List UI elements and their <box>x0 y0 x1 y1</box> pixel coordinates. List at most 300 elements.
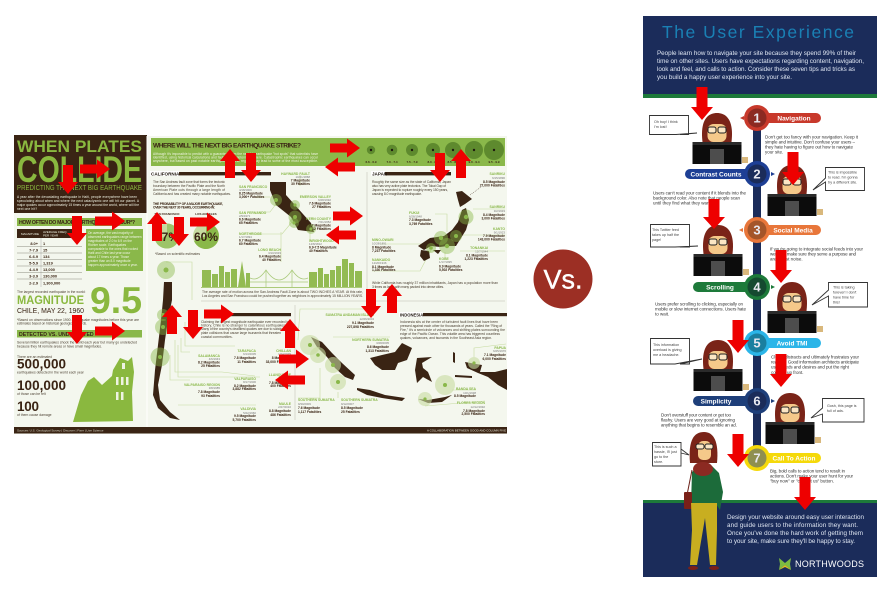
speech bubble 7: This is such a <box>654 445 677 449</box>
illustration: skyline and bridge: The average rate of motion across the San Andreas Fault Zone is about TWO INCHES A YEAR. At this rate, <box>202 290 363 294</box>
arrow <box>80 160 110 178</box>
labels: Chile quakes: 8.8 Magnitude <box>269 409 291 413</box>
stats: detected counts: 100 <box>17 399 39 414</box>
tip 4: scrolling: Users prefer scrolling to clicking, especially on <box>655 302 743 306</box>
labels: Indonesia quakes: 8.5 Magnitude <box>454 394 476 398</box>
character at desk 1 <box>692 113 748 164</box>
arrow <box>770 354 792 387</box>
labels: Chile quakes: VALDIVIA <box>240 407 257 411</box>
tip 1: navigation: your site. <box>765 150 783 154</box>
tip 1: navigation: they hate having to figure out how to navigate <box>765 144 853 150</box>
section: Chile: Claiming the largest magnitude earthquake ever recorded in <box>201 320 289 324</box>
tip 1: navigation: simple and intuitive. Don't confuse your users – <box>765 140 855 144</box>
arrow <box>770 250 792 283</box>
section: Chile <box>201 313 291 339</box>
panel: earthquake infographic <box>14 135 507 434</box>
character at desk 3 <box>694 225 749 276</box>
heading: how often <box>17 218 142 226</box>
labels: California quakes: LONG BEACH <box>258 248 282 252</box>
section: California: American Plate cuts through a large length of <box>153 188 225 192</box>
arrow <box>727 434 749 467</box>
labels: Chile quakes: 1/24/1939 <box>278 352 291 356</box>
arrow <box>782 152 804 185</box>
arrow <box>727 320 749 353</box>
section: Indonesia: pressed against each other for thousands of years. Called the "Ring of <box>400 324 502 328</box>
stats: detected counts: 100,000 <box>17 378 66 393</box>
labels: Indonesia quakes: 9.1 Magnitude <box>352 321 374 325</box>
tip 1: navigation <box>740 105 859 154</box>
labels: Japan quakes: 6.9 Magnitude <box>439 264 461 268</box>
speech bubble 4: have time for <box>833 296 855 300</box>
labels: Indonesia quakes: SUMATRA ANDAMAN ISLAND <box>326 313 375 317</box>
labels: Chile quakes: 486 Fatalities <box>270 413 291 417</box>
labels: Chile quakes: 400 Fatalities <box>270 384 291 388</box>
labels: Japan quakes: SANRIKU <box>490 172 506 176</box>
footer bar: A COLLABORATION BETWEEN GOOD AND COLUMN FIVE <box>427 428 506 432</box>
header: title and intro: The User Experience <box>662 22 854 42</box>
labels: Chile quakes: VALPARAISO REGION <box>184 383 221 387</box>
stats: detected counts: earthquakes detected in the world each year <box>17 370 85 374</box>
tip 5: avoid TMI: Avoid TMI <box>777 340 808 348</box>
labels: Indonesia quakes: FLORES REGION <box>457 401 486 405</box>
callout: vast majority: Richter scale. Earthquakes <box>88 243 126 247</box>
tip 6: simplicity: 6 <box>753 394 761 408</box>
labels: California quakes: 3,000+ Fatalities <box>239 195 265 199</box>
tip 6: simplicity: Don't overstuff your content or get too <box>661 412 731 418</box>
speech bubble 4 <box>812 282 868 307</box>
section: Japan: Roughly the same size as the state of California, Japan <box>372 180 451 184</box>
map: Chile <box>150 261 260 420</box>
labels: Japan quakes: 5,502 Fatalities <box>439 268 463 272</box>
table: magnitude frequency: 5-5.9 <box>29 260 39 266</box>
labels: California quakes: 27 Fatalities <box>312 205 331 209</box>
labels: Japan quakes: TONANKAI <box>470 246 488 250</box>
labels: California quakes: NORTHRIDGE <box>239 232 263 236</box>
tip 5: avoid TMI: user needs and desires and put the right <box>771 364 850 370</box>
labels: Japan quakes: 8.4 Magnitude <box>483 213 505 217</box>
heading panel: where will the next quake strike: identified, using historical calculations and fault data to determine where. Catastrophic earthquakes can occur <box>153 156 319 160</box>
section: Indonesia: INDONESIA <box>400 312 423 318</box>
labels: California quakes: 65 Fatalities <box>239 221 258 225</box>
section: California: SAN FRANCISCO <box>154 212 180 216</box>
tip 3: social media: aren't just noise. <box>770 256 803 262</box>
arrow <box>703 199 725 229</box>
speech bubble 6: Gosh, this page is <box>827 404 857 408</box>
speech bubble 5: me a headache. <box>653 353 679 357</box>
labels: Indonesia quakes: 12/12/1992 <box>471 405 485 409</box>
labels: Chile quakes: 5/22/1960 <box>243 411 256 415</box>
labels: California quakes: 3/10/1933 <box>268 251 281 255</box>
labels: Indonesia quakes: 12/26/2004 <box>360 317 374 321</box>
section: California: CALIFORNIA <box>151 172 180 176</box>
character at desk 4 <box>768 282 823 333</box>
labels: California quakes: 6.4 Magnitude <box>259 254 281 258</box>
illustration: skyline and bridge <box>201 259 363 298</box>
stat: largest earthquake 9.5: CHILE, MAY 22, 1960 <box>17 306 84 315</box>
section: Indonesia: edge of the Pacific Ocean. This volatile area has triggered countless <box>400 332 500 336</box>
labels: California quakes: 2/9/1971 <box>239 214 251 218</box>
arrow <box>190 212 220 232</box>
footer panel <box>643 500 877 577</box>
callout: vast majority: On average, the vast majority of <box>88 231 133 235</box>
table: magnitude frequency: AVERAGE FREQ. <box>43 230 67 234</box>
arrow <box>67 315 87 344</box>
speech bubble 2: try a different site. <box>828 180 857 184</box>
callout: vast majority: happen approximately once a year. <box>88 263 138 267</box>
labels: Chile quakes: 25 Fatalities <box>201 364 220 368</box>
title block: PREDICTING THE NEXT BIG EARTHQUAKE <box>17 185 142 192</box>
arrow <box>279 350 309 368</box>
labels: Chile quakes: CHILLAN <box>276 349 292 353</box>
arrow <box>691 87 713 120</box>
labels: Indonesia quakes: BANDA SEA <box>456 387 477 391</box>
arrow <box>241 153 261 182</box>
stat: largest earthquake 9.5: 9.5 <box>90 280 142 321</box>
tip 5: avoid TMI: Clutter distracts and ultimately frustrates your <box>771 354 860 360</box>
speech bubble 1: Oh boy! I think <box>654 120 678 124</box>
section: California: California and has created many notable earthquakes. <box>153 192 231 196</box>
tip 2: contrast counts <box>653 161 775 206</box>
heading panel: where will the next quake strike <box>151 138 505 166</box>
legend: magnitude circles: 7.5 - 7.9 <box>406 160 418 164</box>
chart: probability pies: 67% <box>155 230 179 244</box>
table: magnitude frequency: 134 <box>43 254 50 259</box>
speech bubble 2: This is impossible <box>828 170 857 174</box>
labels: Japan quakes: 8.1 Magnitude <box>466 254 488 258</box>
labels: Japan quakes: MINO-OWARI <box>372 238 394 242</box>
labels: Japan quakes <box>372 172 506 272</box>
stat: largest earthquake 9.5: The largest recorded earthquake in the world: <box>17 290 85 294</box>
labels: Chile quakes: LLANQUIHUE <box>269 373 292 377</box>
tip 4: scrolling <box>655 274 775 316</box>
table: magnitude frequency <box>17 229 82 287</box>
title block <box>14 135 147 213</box>
tip 7: call to action: 7 <box>753 450 761 466</box>
labels: Japan quakes: 1,330 Fatalities <box>372 268 396 272</box>
labels: California quakes: 10/21/1868 <box>296 175 310 179</box>
stat: largest earthquake 9.5: estimates based on historical geological records. <box>17 322 87 326</box>
labels: California quakes: 12/8/1812 <box>309 242 322 246</box>
tip 6: simplicity: Simplicity <box>701 398 732 406</box>
section: Japan: Japan is expected to rupture roughly every 150 years, <box>372 188 448 192</box>
standing woman <box>684 432 723 570</box>
speech bubble 2 <box>813 168 864 190</box>
arrow <box>430 153 450 182</box>
header: title and intro: People learn how to navigate your site because they spend 99% of their <box>657 50 856 57</box>
labels: Japan quakes: 8.5 Magnitude <box>483 180 505 184</box>
speech bubble 4: This is taking <box>833 286 855 290</box>
labels: California quakes <box>239 172 337 262</box>
stats: detected counts: There are an estimated <box>17 355 52 359</box>
table: magnitude frequency: 8.0+ <box>30 241 39 246</box>
labels: California quakes: 40 Fatalities <box>262 258 281 262</box>
tip 5: avoid TMI <box>744 330 860 375</box>
title block: major quakes occur approximately 15 times a year around the world, where will the <box>17 203 139 207</box>
legend: magnitude circles: 8.5 - 8.9 <box>447 160 459 164</box>
tip 2: contrast counts: Contrast Counts <box>691 172 742 178</box>
tip 7: call to action: actions. Don't make your user hunt for your <box>770 474 854 478</box>
header: title and intro: look and feel, and calls to action. Consider these seven tips and tricks as <box>657 66 855 73</box>
labels: Chile quakes: 8.2 Magnitude <box>234 384 256 388</box>
labels: Japan quakes: 3,769 Fatalities <box>409 222 433 226</box>
speech bubble 2: to read. I'm gonna <box>828 176 859 180</box>
arrow <box>67 216 87 245</box>
labels: Chile quakes: 11/7/1837 <box>278 376 291 380</box>
labels: California quakes: 30 Fatalities <box>291 182 310 186</box>
labels: Chile quakes: 8 Magnitude <box>272 356 291 360</box>
tip 2: contrast counts: Users can't read your content if it blends into the <box>653 190 746 196</box>
arrow <box>330 138 360 158</box>
labels: Japan quakes: 1/17/1995 <box>439 260 452 264</box>
tip 3: social media: Social Media <box>773 228 813 234</box>
table: magnitude frequency: 1,300,000 <box>43 280 60 286</box>
footer panel: to your site, make sure they'll be happy to stay. <box>727 538 855 545</box>
title block: next one hit? <box>17 207 37 211</box>
labels: Indonesia quakes: PAPUA <box>494 346 507 350</box>
speech bubble 3: page! <box>652 238 661 242</box>
arrow <box>220 149 240 178</box>
labels: California quakes: SAN FRANCISCO <box>239 185 268 189</box>
tip 7: call to action: Big, bold calls to action tend to result in <box>770 468 845 474</box>
labels: Chile quakes: 4/6/1943 <box>209 357 220 361</box>
labels: California quakes: 4/18/1906 <box>239 188 252 192</box>
table: magnitude frequency: 4-4.9 <box>29 267 39 272</box>
arrow <box>361 289 381 318</box>
tip 6: simplicity <box>661 388 775 428</box>
heading panel: where will the next quake strike: Although it's impossible to predict with a guarantee when the next big earthquake "hot spots" that scientists have <box>153 152 318 156</box>
section: Chile: history, Chile is no stranger to calamitous earthquakes. <box>201 324 286 328</box>
labels: Indonesia quakes: 6/25/1976 <box>493 349 506 353</box>
labels: Japan quakes: 143,000 Fatalities <box>478 238 505 242</box>
arrow <box>325 158 355 176</box>
labels: California quakes: 7/21/1952 <box>318 220 331 224</box>
labels: Japan quakes: 6/28/1948 <box>409 214 422 218</box>
stats: detected counts: of those can be felt <box>17 392 46 396</box>
heading: detected vs undetected <box>17 330 142 338</box>
labels: Indonesia quakes: 1,117 Fatalities <box>298 410 321 414</box>
section: Japan: While California has roughly 37 million inhabitants, Japan has a population more than <box>372 281 498 285</box>
arrows: red overlay arrows <box>58 87 816 510</box>
tip 2: contrast counts: background color. Also note that people scan <box>653 196 740 200</box>
header: title and intro: you build a happy user experience into your site. <box>657 74 792 81</box>
callout: vast majority: about 17 times a year. Those <box>88 255 129 259</box>
labels: California quakes: 6.7 Magnitude <box>239 238 261 242</box>
labels: Chile quakes: VALPARAISO <box>234 377 256 381</box>
speech bubble 1 <box>650 116 697 134</box>
labels: Chile quakes: SALAMANCA <box>198 354 221 358</box>
header: title and intro <box>643 16 877 98</box>
callout: vast majority: greater than an 8.0 magnitude <box>88 259 131 263</box>
tip 5: avoid TMI: readers. Good information architects anticipate <box>771 360 859 364</box>
labels: Japan quakes: SANRIKU <box>490 205 506 209</box>
labels: California quakes: 7.7 Magnitude <box>309 224 331 228</box>
labels: Chile quakes: 2/27/2010 <box>278 405 291 409</box>
labels: Chile quakes: 7.8 Magnitude <box>269 381 291 385</box>
arrow <box>162 305 182 334</box>
speech bubble 4: this! <box>833 300 840 304</box>
labels: California quakes: 8.25 Magnitude <box>239 192 263 196</box>
arrow <box>326 226 356 244</box>
labels: Indonesia quakes: 8.6 Magnitude <box>367 345 389 349</box>
labels: Japan quakes: 1,223 Fatalities <box>465 257 488 261</box>
table: magnitude frequency: 2-2.9 <box>29 280 39 286</box>
labels: Indonesia quakes: SOUTHERN SUMATRA <box>298 398 335 402</box>
title block: COLLIDE <box>17 149 142 190</box>
legend: magnitude circles: 7.0 - 7.4 <box>386 160 398 164</box>
character at desk 6 <box>766 393 821 444</box>
speech bubble 7 <box>652 442 689 466</box>
section: California: OVER THE NEXT 30 YEARS, OCCURRING IN: <box>153 206 215 210</box>
labels: Indonesia quakes: 7.8 Magnitude <box>463 409 485 413</box>
footer panel: and guide users to the information they want. <box>727 522 858 529</box>
timeline spine <box>753 115 761 455</box>
speech bubble 3: This Twitter feed <box>652 228 679 232</box>
labels: Indonesia quakes <box>298 313 507 416</box>
arrow <box>95 212 125 230</box>
speech bubble 5: overload is giving <box>653 348 682 352</box>
section: Japan: JAPAN <box>372 172 388 176</box>
labels: Chile quakes: 7.8 Magnitude <box>234 356 256 360</box>
section: Indonesia: Fire," it's a semicircle of volcanoes and shifting plates surrounding the <box>400 328 505 332</box>
labels: Japan quakes: 10/28/1891 <box>372 242 387 246</box>
section: Indonesia: Indonesia sits at the center of turbulent fault lines that have been <box>400 320 498 324</box>
labels: California quakes: KERN COUNTY <box>306 217 332 221</box>
labels: Chile quakes: 93 Fatalities <box>201 394 220 398</box>
section: California: *Based on scientific estimates <box>155 252 200 256</box>
speech bubble 1: I'm lost! <box>654 125 667 129</box>
speech bubble 6: full of ads. <box>827 409 844 413</box>
section: Chile: plate collisions that cause large tsunamis that threaten <box>201 331 281 335</box>
callout: vast majority: observed earthquakes range between <box>88 235 142 239</box>
character at desk 5 <box>694 340 749 391</box>
labels: California quakes: HAYWARD FAULT <box>281 172 311 176</box>
section: California <box>150 171 271 256</box>
labels: Chile quakes: 5,700 Fatalities <box>233 418 256 422</box>
heading: how often: HOW OFTEN DO MAJOR EARTHQUAKES OCCUR*? <box>19 220 135 226</box>
labels: California quakes: WRIGHTWOOD <box>309 239 334 243</box>
title block: A year after the devastating earthquake in Haiti, people everywhere have been <box>17 195 137 199</box>
labels: Chile quakes: 7.8 Magnitude <box>198 390 220 394</box>
labels: California quakes: 7.6 Magnitude <box>309 202 331 206</box>
tip 5: avoid TMI: content up front. <box>771 370 804 375</box>
labels: California quakes: SAN FERNANDO <box>239 211 267 215</box>
labels: Japan quakes: 7,237 Fatalities <box>372 249 396 253</box>
tip 3: social media <box>739 217 864 262</box>
arrow <box>382 284 402 313</box>
labels: California quakes: 1/17/1994 <box>239 235 252 239</box>
speech bubble 5: This information <box>653 343 679 347</box>
footer bar <box>14 427 507 434</box>
labels: Japan quakes: 27,000 Fatalities <box>480 184 505 188</box>
arrow <box>169 217 189 246</box>
stats: detected counts: of them cause damage <box>17 413 52 417</box>
labels: California quakes: 7 Magnitude <box>291 178 310 182</box>
labels: Japan quakes: 6/15/1896 <box>492 176 505 180</box>
labels: Indonesia quakes: 25 Fatalities <box>341 410 360 414</box>
table: magnitude frequency: 6-6.9 <box>29 254 39 259</box>
footer bar: Sources: U.S. Geological Survey | Discover | Fixer | Live Science <box>17 428 104 432</box>
table: magnitude frequency: 3-3.9 <box>29 274 39 278</box>
section: Indonesia: quakes, volcanoes, and tsunamis in the Southeast Asia region. <box>400 336 492 340</box>
labels: California quakes: EMERSON VALLEY <box>300 195 332 199</box>
section: Indonesia <box>399 312 507 340</box>
labels: Indonesia quakes: 2,500 Fatalities <box>462 412 485 416</box>
tip 7: call to action <box>744 445 854 484</box>
legend: magnitude circles: 9.5 - 9.9 <box>488 160 500 164</box>
heading: detected vs undetected: DETECTED VS. UNDETECTED <box>19 332 94 338</box>
badge: Vs.: Vs. <box>543 264 583 294</box>
speech bubble 6 <box>811 398 864 422</box>
footer panel: Design your website around easy user interaction <box>727 514 864 521</box>
labels: Japan quakes: FUKUI <box>409 211 419 215</box>
speech bubble 7: go to the <box>654 455 668 459</box>
tip 2: contrast counts: 2 <box>753 166 761 182</box>
arrow <box>204 304 234 324</box>
labels: Indonesia quakes: 6,000 Fatalities <box>483 357 506 361</box>
labels: Indonesia quakes: 3/28/2005 <box>376 341 389 345</box>
labels: Chile quakes: TARAPACA <box>237 349 257 353</box>
labels: Japan quakes: 7.9 Magnitude <box>483 234 505 238</box>
stat: largest earthquake 9.5 <box>17 280 142 326</box>
labels: Chile quakes: 33,000 Fatalities <box>266 360 291 364</box>
heading panel: where will the next quake strike: anywhere, but based on past notable earthquakes, these regions may lead to some of the most susceptible. <box>153 159 318 163</box>
footer panel: Once you've done the hard work of getting them <box>727 530 863 537</box>
labels: Indonesia quakes: NORTHERN SUMATRA <box>352 338 390 342</box>
arrow <box>58 165 78 194</box>
labels: Japan quakes: 3,000 Fatalities <box>482 216 505 220</box>
table: magnitude frequency: 13,000 <box>43 267 55 272</box>
table: magnitude frequency: 15 <box>43 248 48 252</box>
labels: Japan quakes: 12/7/1944 <box>475 250 488 254</box>
section: California: boundary between the Pacific Plate and the North <box>153 184 225 188</box>
labels: Indonesia quakes: 7.6 Magnitude <box>298 406 320 410</box>
tip 2: contrast counts: until they find what they want. <box>653 200 712 206</box>
table: magnitude frequency: PER YEAR <box>43 234 59 238</box>
tip 1: navigation: Don't get too fancy with your navigation. Keep it <box>765 134 859 140</box>
labels: Japan quakes: 9/1/1923 <box>494 230 505 234</box>
section: Japan: 3 times as large with many packed into dense cities. <box>372 285 444 289</box>
labels: Japan quakes: NANKAIDO <box>372 258 391 262</box>
labels: Indonesia quakes: 9/12/2007 <box>341 402 354 406</box>
section: California: LOS ANGELES <box>195 212 217 216</box>
labels: Chile quakes <box>184 349 292 422</box>
labels: Chile quakes: 3,882 Fatalities <box>233 387 256 391</box>
heading panel: where will the next quake strike: WHERE WILL THE NEXT BIG EARTHQUAKE STRIKE? <box>153 142 301 150</box>
arrow <box>95 322 125 340</box>
section: Chile: coastal communities. <box>201 335 233 339</box>
labels: Chile quakes: 9.5 Magnitude <box>234 414 256 418</box>
labels: Indonesia quakes: 7.1 Magnitude <box>484 353 506 357</box>
callout: vast majority <box>86 229 143 271</box>
section: Japan: also has very active plate tectonics. The Tokai Gap of <box>372 184 446 188</box>
tip 3: social media: 3 <box>753 222 761 238</box>
labels: Japan quakes: 3/2/1933 <box>494 209 505 213</box>
labels: Chile quakes: 11 Fatalities <box>237 360 256 364</box>
tip 3: social media: website, make sure they serve a purpose and <box>770 252 856 256</box>
labels: California quakes: 6/28/1992 <box>318 198 331 202</box>
chart: probability pies <box>154 223 219 249</box>
tip 6: simplicity: flashy. Users are very good at ignoring <box>661 418 735 422</box>
stats: detected counts: because they hit remote areas or have small magnitudes. <box>17 344 102 348</box>
labels: Japan quakes: KANTO <box>493 227 505 231</box>
labels: California quakes: 60 Fatalities <box>239 242 258 246</box>
labels: Chile quakes: 8.2 Magnitude <box>198 360 220 364</box>
labels: Japan quakes: 8.1 Magnitude <box>372 265 394 269</box>
arrow <box>147 212 167 241</box>
labels: Japan quakes: 12/20/1946 <box>372 261 387 265</box>
legend: magnitude circles: 9.0 - 9.4 <box>468 160 480 164</box>
labels: Indonesia quakes: 9/30/2009 <box>298 402 311 406</box>
